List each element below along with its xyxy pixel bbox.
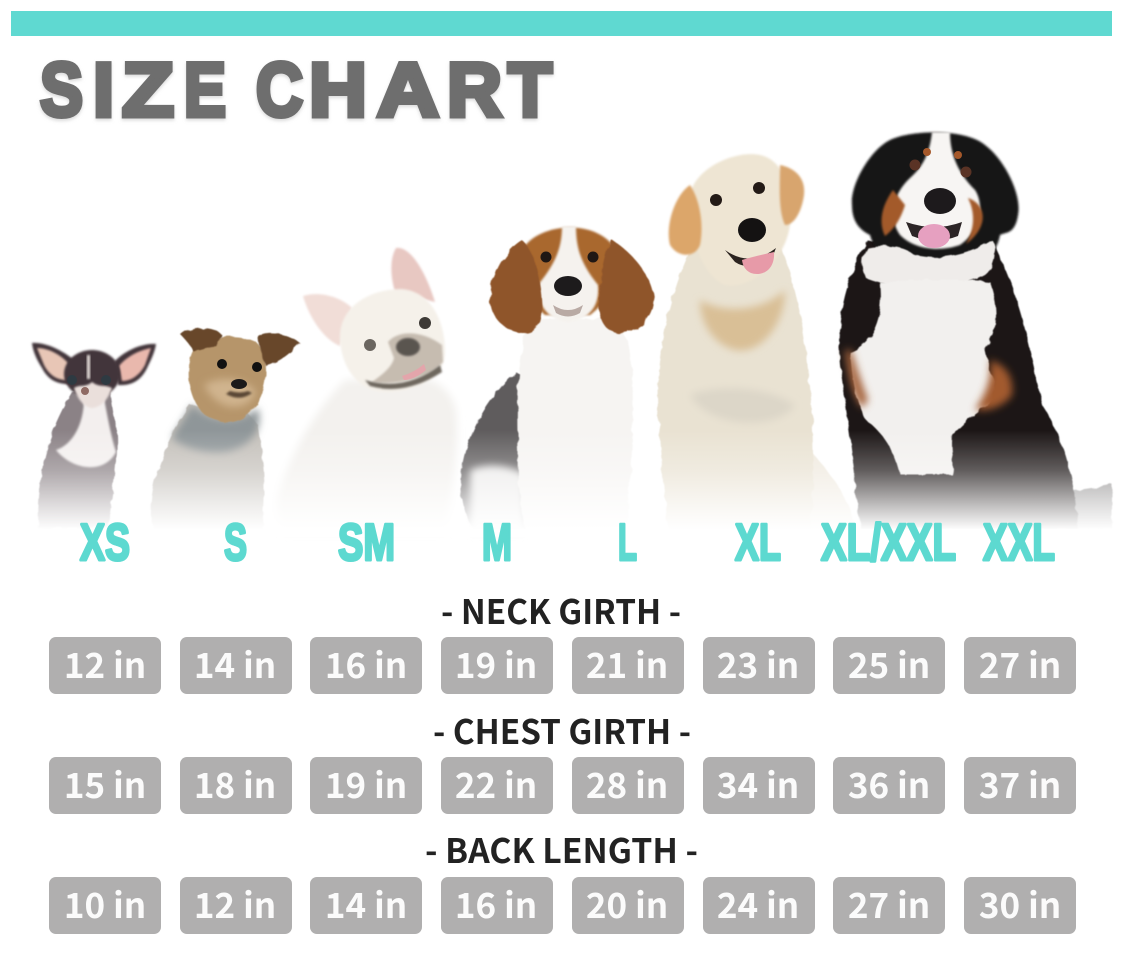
dog: bernese mountain dog XXL	[839, 132, 1112, 529]
row: back length values: 12 in	[194, 878, 276, 929]
row: back length values: 20 in	[586, 878, 668, 929]
dog: chihuahua XS	[32, 343, 156, 528]
size labels	[80, 514, 1055, 572]
white fade over dogs	[0, 430, 1138, 530]
row: back length values: 30 in	[979, 878, 1061, 929]
row: neck girth values: 27 in	[979, 638, 1061, 689]
heading: neck girth: - NECK GIRTH -	[441, 585, 681, 634]
title: S	[40, 48, 83, 133]
row: back length values: 27 in	[848, 878, 930, 929]
dog: french bulldog SM	[277, 248, 457, 532]
dog: beagle M	[461, 226, 654, 532]
row: chest girth values: 22 in	[455, 758, 537, 809]
row: back length values: 14 in	[325, 878, 407, 929]
size labels: XL/XXL	[821, 514, 956, 572]
size labels: M	[482, 514, 512, 572]
size labels: S	[224, 514, 247, 572]
title: R	[447, 48, 502, 133]
title: T	[508, 48, 552, 133]
row: chest girth values: 18 in	[194, 758, 276, 809]
row: chest girth values: 28 in	[586, 758, 668, 809]
row: back length values	[49, 877, 1076, 934]
dog: golden retriever L / XL	[658, 154, 858, 532]
size labels: XS	[80, 514, 130, 572]
title	[40, 48, 552, 133]
row: chest girth values: 19 in	[325, 758, 407, 809]
row: chest girth values: 34 in	[717, 758, 799, 809]
row: neck girth values	[49, 637, 1076, 694]
title: A	[377, 48, 439, 133]
row: back length values: 24 in	[717, 878, 799, 929]
heading: chest girth: - CHEST GIRTH -	[433, 705, 691, 754]
row: back length values: 16 in	[455, 878, 537, 929]
dog row photo area	[0, 132, 1138, 537]
size labels: L	[618, 514, 637, 572]
row: neck girth values: 23 in	[717, 638, 799, 689]
row: chest girth values: 37 in	[979, 758, 1061, 809]
row: neck girth values: 12 in	[64, 638, 146, 689]
title: E	[184, 48, 226, 133]
row: neck girth values: 14 in	[194, 638, 276, 689]
size labels: SM	[338, 514, 395, 572]
dog: yorkie S	[151, 327, 300, 530]
size labels: XXL	[983, 514, 1055, 572]
row: neck girth values: 21 in	[586, 638, 668, 689]
row: neck girth values: 19 in	[455, 638, 537, 689]
row: neck girth values: 25 in	[848, 638, 930, 689]
heading: back length: - BACK LENGTH -	[425, 824, 698, 873]
row: chest girth values: 36 in	[848, 758, 930, 809]
title: I	[93, 48, 114, 133]
size labels: XL	[735, 514, 781, 572]
row: chest girth values	[49, 757, 1076, 814]
row: back length values: 10 in	[64, 878, 146, 929]
row: chest girth values: 15 in	[64, 758, 146, 809]
top teal bar	[11, 11, 1112, 36]
row: neck girth values: 16 in	[325, 638, 407, 689]
title: H	[309, 48, 367, 133]
title: Z	[122, 48, 174, 133]
title: C	[256, 48, 303, 133]
